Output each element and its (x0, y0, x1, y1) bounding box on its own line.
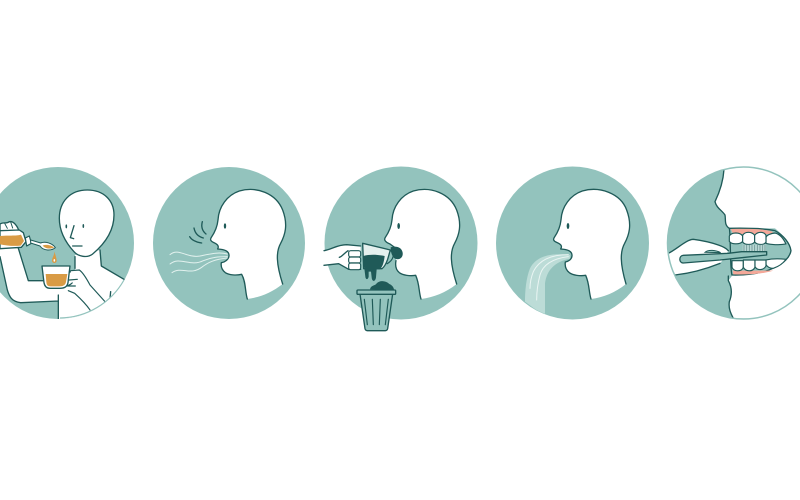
sound marks (190, 222, 206, 243)
mouth interior (729, 228, 791, 275)
cup (363, 243, 390, 269)
eye (567, 223, 569, 229)
hand (669, 240, 728, 274)
trash bin (357, 281, 396, 331)
panel: person adding syrup to a cup (0, 167, 134, 327)
illustration row (0, 166, 800, 332)
panel: water flowing from mouth (496, 166, 649, 320)
circle background 5 (668, 167, 800, 319)
lower teeth (732, 259, 786, 271)
gums (731, 229, 775, 234)
water stream (525, 254, 570, 317)
body and arm (0, 248, 124, 319)
panel: bad breath (153, 167, 305, 319)
mouth blob (391, 247, 403, 259)
bristles (744, 245, 765, 251)
circle outline 5 (668, 167, 800, 319)
breath (170, 252, 227, 273)
face (65, 224, 84, 246)
panel: brushing teeth (663, 165, 800, 319)
cup (42, 266, 70, 288)
eye (224, 223, 226, 229)
circle background 3 (324, 166, 478, 320)
hand (324, 245, 361, 269)
spoon (31, 240, 55, 250)
liquid (363, 255, 385, 281)
face white area (715, 165, 800, 318)
circle background 4 (496, 166, 649, 320)
head (59, 190, 114, 256)
panel: spitting into a trash bin (324, 166, 478, 331)
upper teeth (729, 232, 786, 245)
head and contents (324, 189, 460, 331)
fingers on bottle (0, 222, 19, 231)
figure with syrup and cup (0, 190, 124, 327)
toothbrush (680, 252, 767, 263)
hand on cup (70, 270, 77, 284)
eye (397, 223, 400, 229)
head profile (170, 189, 286, 299)
circle background 2 (153, 167, 305, 319)
circle rim 1 (60, 280, 124, 318)
drop (52, 251, 57, 263)
fingers (349, 251, 361, 270)
bottle (0, 230, 26, 249)
head profile (554, 189, 630, 299)
circle background 1 (0, 167, 134, 319)
